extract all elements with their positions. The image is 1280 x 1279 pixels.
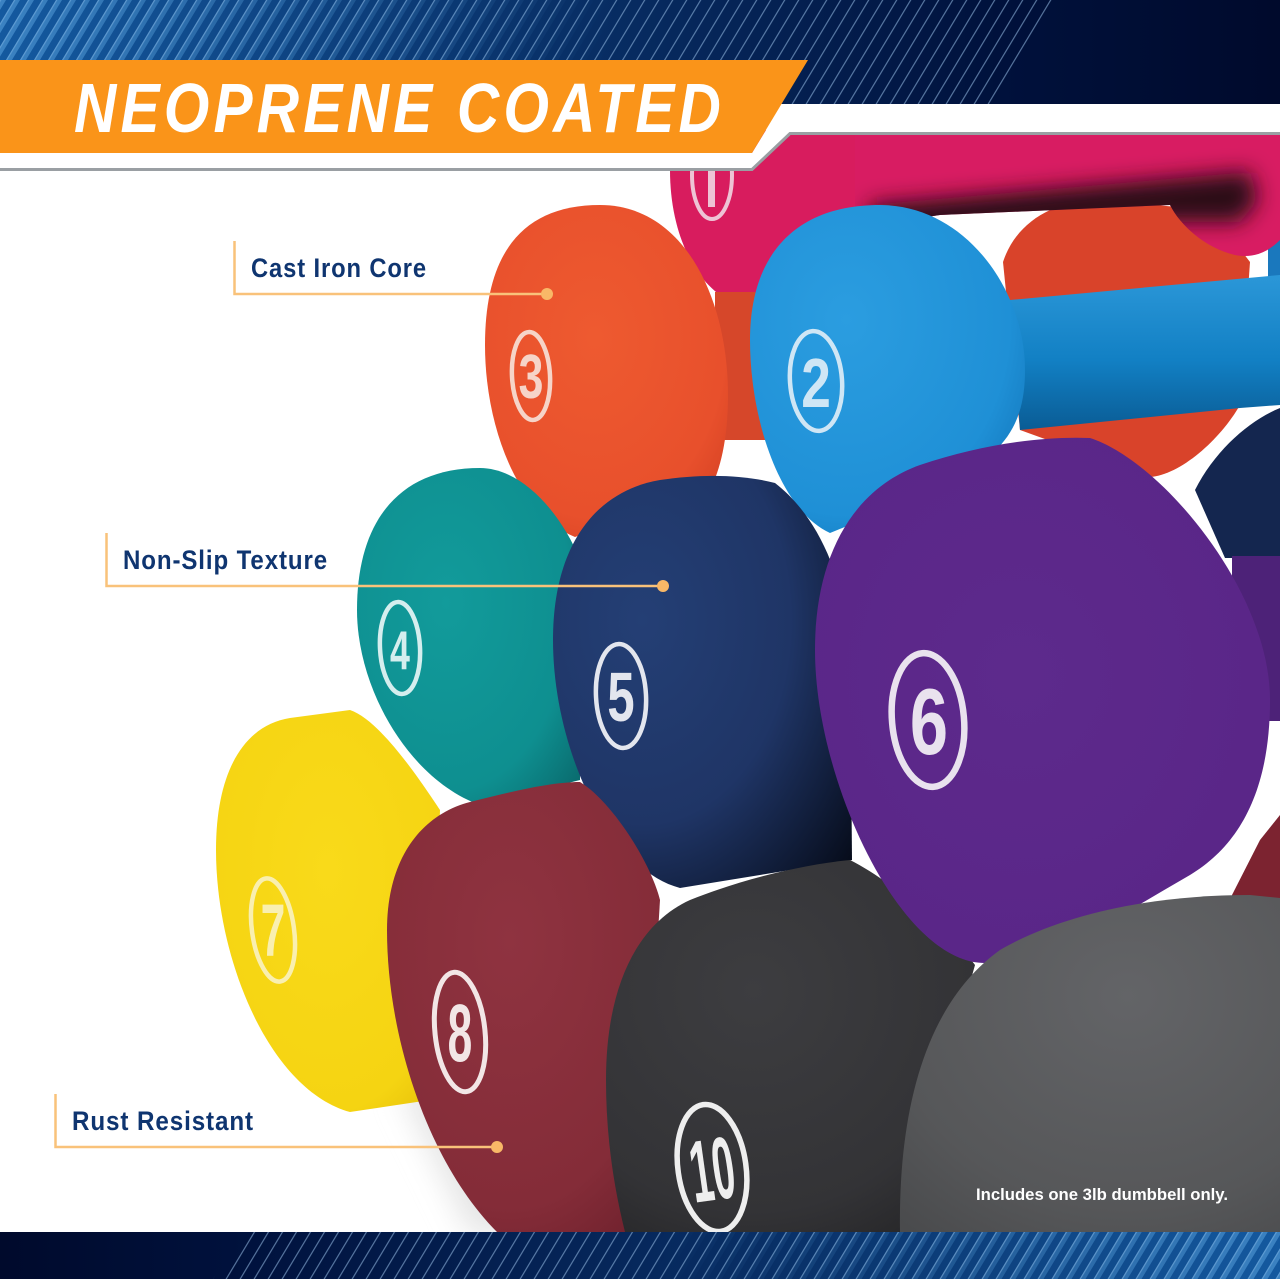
dumbbell: navy 5lb: 5	[607, 657, 635, 736]
header white band	[0, 104, 1280, 170]
dumbbell: orange 3lb: 3	[519, 343, 543, 412]
floor shadow	[400, 1080, 540, 1235]
header background	[0, 0, 1280, 104]
title: NEOPRENE COATED	[74, 69, 725, 147]
callout: non-slip texture	[106, 533, 669, 592]
dumbbell: black 10lb: 10	[684, 1119, 741, 1222]
dumbbell: blue 2lb	[750, 205, 1280, 533]
dumbbell: small blue rear	[1268, 240, 1280, 280]
dumbbell: grey 3lb front	[900, 895, 1280, 1232]
callout: rust resistant: Rust Resistant	[72, 1106, 254, 1136]
dumbbell: orange rear head	[1003, 200, 1250, 477]
dumbbell: maroon 8lb	[387, 782, 660, 1232]
dumbbell: navy rear	[1195, 408, 1280, 558]
dumbbell: teal 4lb	[357, 468, 580, 805]
callout: rust resistant	[56, 1094, 503, 1153]
dumbbell: purple 6lb: 6	[910, 671, 948, 775]
dumbbell: navy 5lb	[553, 476, 852, 888]
dumbbell: purple 6lb	[815, 438, 1270, 963]
footer band	[0, 1232, 1280, 1279]
dumbbell: blue 2lb: 2	[801, 345, 831, 423]
dumbbell: pink 1lb	[670, 130, 1280, 303]
footnote: Includes one 3lb dumbbell only.	[976, 1185, 1228, 1204]
dumbbell: yellow 7lb: 7	[261, 889, 285, 972]
header grey rule	[0, 134, 1280, 170]
dumbbell: maroon 8lb: 8	[448, 986, 472, 1078]
dumbbell: yellow 7lb	[216, 710, 440, 1112]
dumbbell: maroon rear	[1232, 815, 1280, 900]
dumbbell: teal 4lb: 4	[390, 619, 410, 681]
dumbbell: orange 3lb	[485, 205, 765, 537]
dumbbell: purple rear handle	[1232, 556, 1280, 721]
dumbbell: black 10lb	[606, 860, 975, 1236]
orange title banner	[0, 60, 808, 153]
callout: cast iron core: Cast Iron Core	[251, 253, 427, 283]
callout: non-slip texture: Non-Slip Texture	[123, 545, 328, 575]
callout: cast iron core	[234, 241, 553, 300]
